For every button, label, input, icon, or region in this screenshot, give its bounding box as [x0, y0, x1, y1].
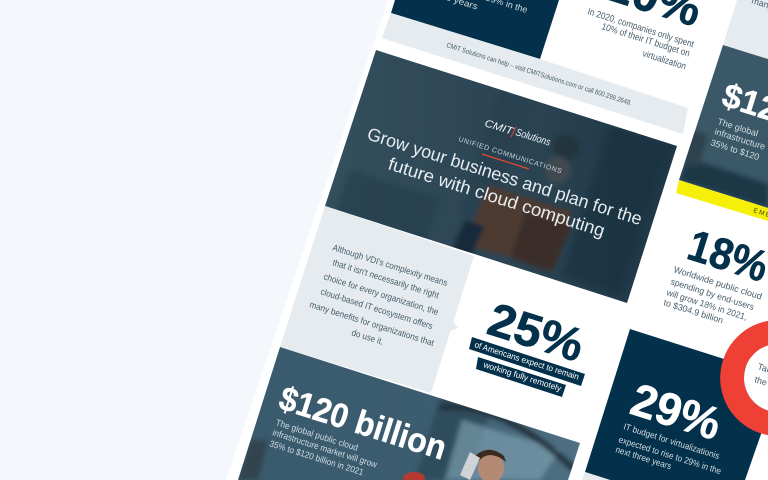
- callout pointer: [449, 320, 458, 332]
- panel: 120 billion photo: [230, 345, 585, 480]
- panel: top navy stat box: [391, 0, 559, 59]
- yellow ribbon: [676, 180, 768, 221]
- banner photo: [320, 50, 680, 305]
- label band two: working fully remotely: [481, 359, 563, 393]
- donut text: the: [753, 374, 768, 388]
- 18 percent description: will grow 18% in 2021,: [665, 287, 749, 322]
- banner eyebrow: UNIFIED COMMUNICATIONS: [457, 136, 563, 175]
- banner headline: future with cloud computing: [386, 154, 607, 241]
- 29 percent description: next three years: [614, 444, 673, 471]
- photo caption: [268, 417, 379, 477]
- logo: CMIT Solutions: [483, 117, 553, 149]
- 10 percent description: In 2020, companies only spent: [586, 6, 696, 50]
- right caption: [709, 116, 767, 162]
- right caption: infrastructure: [713, 126, 767, 152]
- paragraph text: [308, 242, 449, 348]
- photo caption: 35% to $120 billion in 2021: [268, 438, 365, 477]
- panel: 29 percent navy box: [582, 329, 768, 480]
- 29 percent description: expected to rise to 29% in the: [617, 434, 722, 476]
- panel: intro paragraph: [280, 206, 474, 393]
- logo: CMIT Solutions: Solutions: [514, 126, 553, 149]
- 18 percent description: Worldwide public cloud: [672, 264, 763, 302]
- donut centre: [744, 346, 768, 410]
- panel: right photo card: [675, 45, 768, 221]
- 10 percent description: [586, 6, 696, 72]
- stat: 10 percent: [586, 0, 708, 72]
- 18 percent description: spending by end-users: [669, 276, 756, 312]
- 18 percent description: [662, 264, 763, 326]
- stat: 18 percent: [662, 221, 768, 326]
- headline figure: $120 billion: [275, 379, 451, 468]
- photo caption: infrastructure market will grow: [271, 427, 379, 470]
- panel: contact band: [382, 13, 688, 134]
- panel: top right grey block: [723, 0, 768, 59]
- 10 percent description: virtualization: [641, 48, 687, 72]
- white page sheet: [226, 0, 768, 480]
- paragraph text: choice for every organization, the: [322, 271, 440, 317]
- contact text: CMIT Solutions can help – visit CMITSolutions.com or call 800.299.2648.: [445, 42, 633, 107]
- paragraph text: that it isn't necessarily the right: [331, 257, 441, 300]
- 29 percent description: IT budget for virtualizationis: [622, 421, 721, 461]
- photo caption: The global public cloud: [274, 417, 359, 453]
- 29 percent description: [614, 421, 722, 476]
- bottom grey strip: [582, 472, 610, 480]
- donut callout: [720, 321, 768, 435]
- right photo: [675, 45, 768, 210]
- panel: hero banner: [320, 50, 680, 305]
- stat: 25 percent: 25%: [482, 292, 590, 372]
- stat: 25 percent: [469, 292, 590, 397]
- paragraph text: cloud-based IT ecosystem offers: [319, 286, 434, 331]
- paragraph text: Although VDI's complexity means: [331, 242, 449, 288]
- right caption: 35% to $120: [709, 137, 761, 162]
- banner headline: Grow your business and plan for the: [365, 124, 645, 229]
- 18 percent description: to $304.9 billion: [662, 297, 725, 326]
- 10 percent description: 10% of their IT budget on: [600, 21, 691, 60]
- red divider: [482, 154, 529, 169]
- label band one: of Americans expect to remain: [473, 339, 581, 382]
- photo background: [230, 345, 585, 480]
- donut text: [753, 361, 768, 388]
- paragraph text: do use it.: [350, 327, 385, 347]
- 29 percent figure: 29%: [625, 373, 727, 450]
- paragraph text: many benefits for organizations that: [308, 299, 436, 348]
- right caption: The global: [716, 116, 759, 139]
- logo: CMIT Solutions: CMIT: [483, 117, 516, 138]
